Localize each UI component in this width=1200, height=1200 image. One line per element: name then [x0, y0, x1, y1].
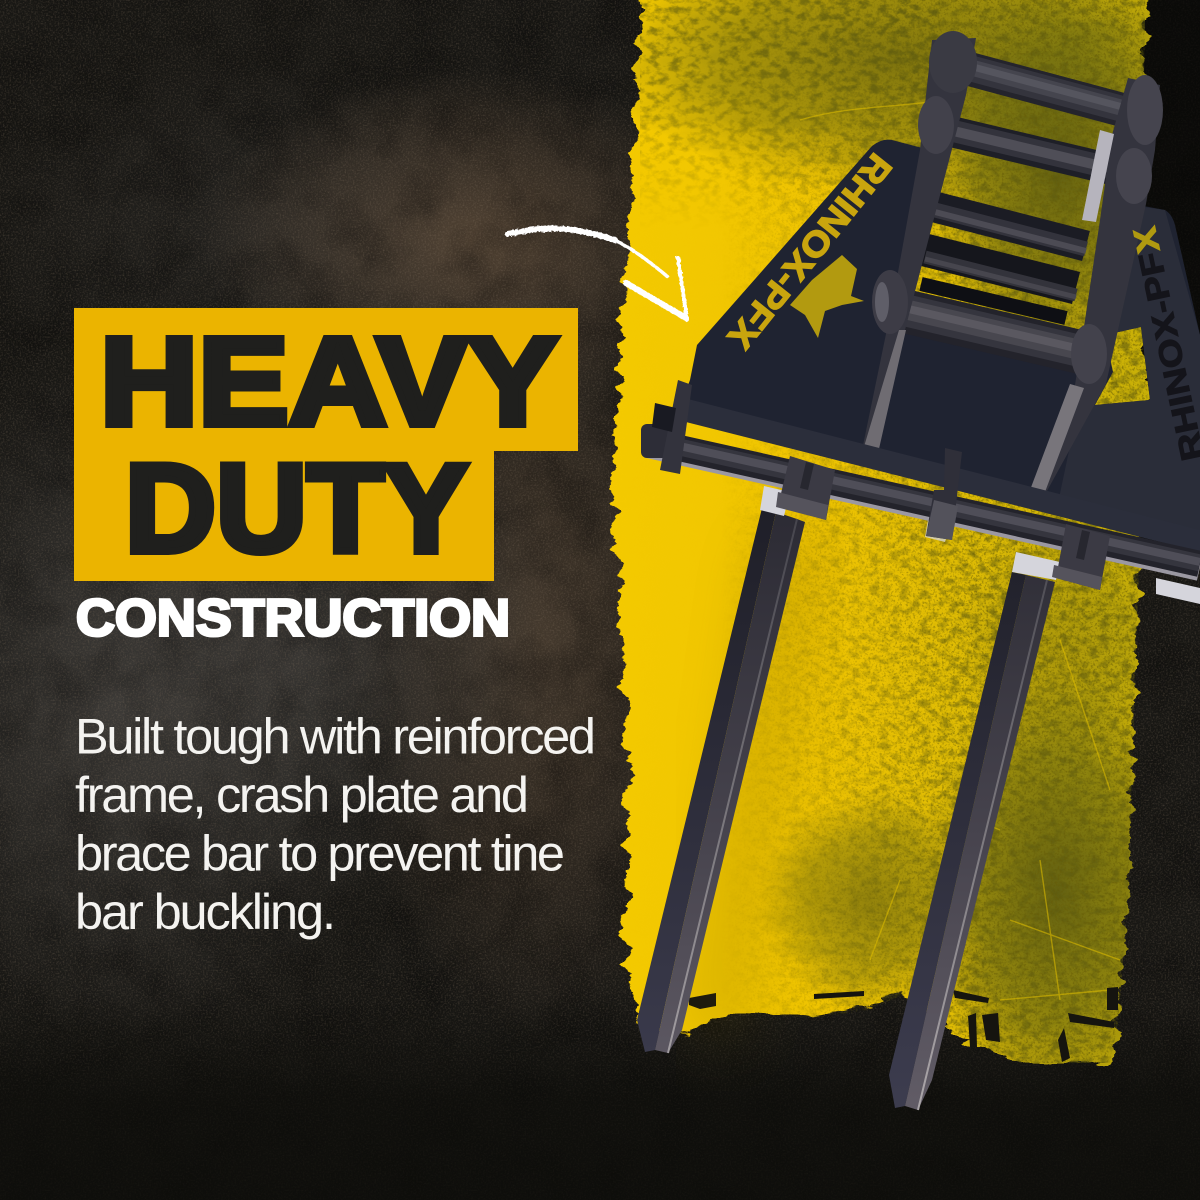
rear tubes: [900, 64, 1130, 352]
clamp: center: [926, 448, 962, 540]
grunge texture: [640, 0, 1148, 1063]
logo: rhino silhouette: [790, 255, 864, 338]
clamp: left: [776, 456, 835, 520]
arrow: chalk arrow pointing to fork: [508, 228, 687, 320]
highlight box: duty: [74, 450, 494, 581]
collars: [929, 31, 977, 93]
tube 2: [945, 129, 1118, 171]
tine: left: [637, 508, 805, 1053]
body text: frame, crash plate and: [75, 766, 529, 823]
paint chips at the edges: [689, 987, 1118, 1062]
illustration: pallet fork attachment: [637, 31, 1200, 1110]
brace bar: [648, 439, 1200, 567]
body text: Built tough with reinforced: [75, 708, 596, 764]
end bracket: left: [641, 380, 692, 474]
panel: yellow painted brush stroke: [609, 0, 1152, 1066]
tube 6: [900, 307, 1080, 352]
body text: brace bar to prevent tine: [75, 824, 565, 882]
crash plate band: [678, 398, 1200, 552]
heading: heavy: HEAVY: [100, 312, 558, 452]
brush shape with rough edge: [609, 0, 1152, 1066]
plate: right gusset tone: [1058, 205, 1200, 540]
heading: duty: DUTY: [125, 440, 468, 578]
subheading: construction: CONSTRUCTION: [76, 590, 510, 648]
collars: [1127, 75, 1163, 145]
tube 5: [921, 284, 1066, 318]
tube 4: [925, 250, 1076, 297]
label: rhinox-pfx on left gusset: RHINOX-PFX: [720, 146, 899, 357]
tube 3: [935, 207, 1086, 251]
clamp: right: [1052, 524, 1110, 590]
light patches under the bar: [760, 486, 1200, 604]
side plate: right: [1027, 75, 1163, 500]
body text: bar buckling.: [75, 883, 336, 940]
side plate: left: [860, 31, 977, 462]
tube 1: [962, 64, 1130, 112]
shadow behind fork: [690, 530, 830, 1040]
tine: right: [889, 572, 1055, 1110]
highlight box: heavy: [74, 308, 578, 451]
headline block: heavy duty: [74, 308, 578, 581]
plate: main frame and gussets: [678, 140, 1200, 548]
